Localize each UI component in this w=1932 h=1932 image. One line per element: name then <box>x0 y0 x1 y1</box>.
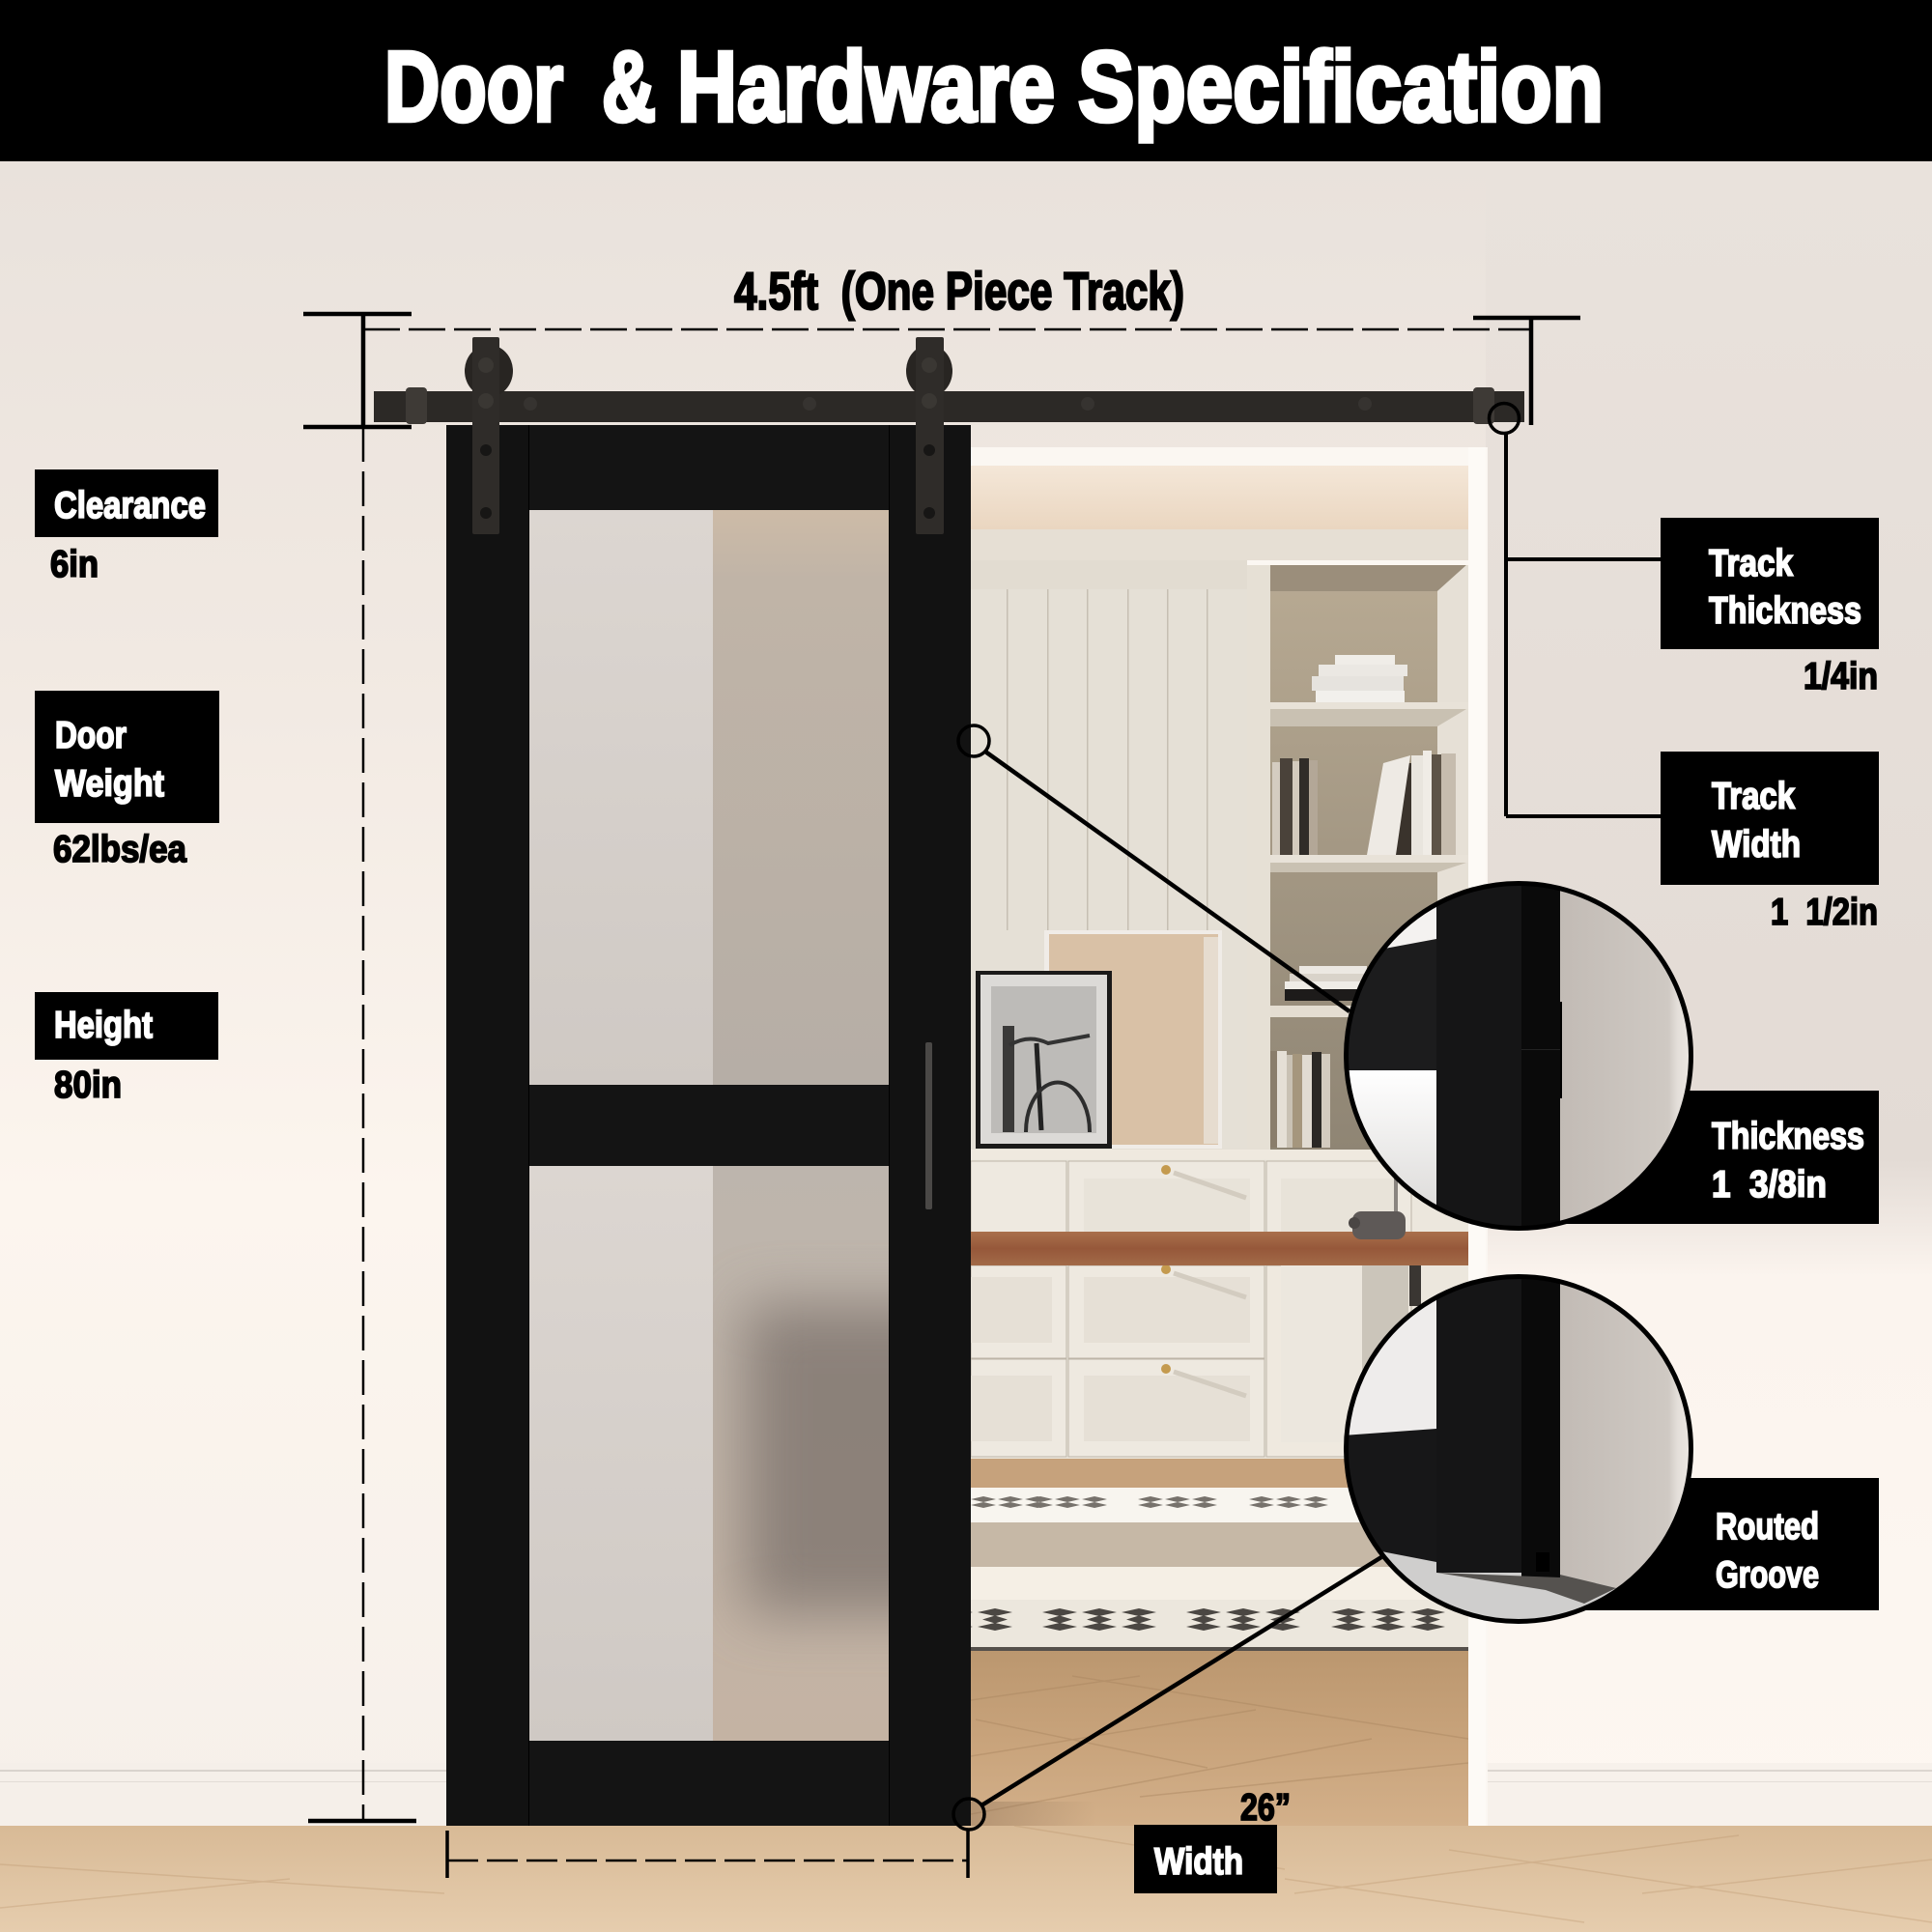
track stops <box>406 387 1494 424</box>
track length dimension <box>363 261 1580 425</box>
track callout connector <box>1490 404 1661 816</box>
label: clearance <box>35 469 218 585</box>
label: width: Width <box>1154 1841 1243 1883</box>
label: thickness: 1 3/8in <box>1712 1164 1827 1206</box>
label: height: 80in <box>54 1065 122 1106</box>
floor <box>0 1826 1932 1932</box>
label: height: Height <box>54 1005 153 1046</box>
title <box>384 31 1604 142</box>
label: track width: Track <box>1712 776 1795 817</box>
books middle shelf <box>1272 751 1456 855</box>
door <box>446 425 971 1826</box>
bookshelf <box>1247 565 1468 1154</box>
label: clearance: Clearance <box>54 485 206 526</box>
left hanger <box>465 337 513 534</box>
title: Hardware <box>677 31 1055 142</box>
height bottom cap <box>308 1819 416 1823</box>
label: clearance: 6in <box>50 544 99 585</box>
books top stack <box>1312 655 1407 702</box>
groove leader <box>953 1557 1381 1830</box>
label: track width: Width <box>1712 824 1801 866</box>
detail circle: routed groove <box>1343 1273 1695 1626</box>
label: door weight: 62lbs/ea <box>53 829 186 870</box>
barn door track <box>374 387 1524 424</box>
frosted glass lower <box>529 1166 889 1741</box>
frosted glass upper <box>529 510 889 1085</box>
leaning beige art <box>1044 930 1222 1149</box>
label: door weight: Weight <box>55 763 164 805</box>
framed bicycle photo <box>976 971 1112 1149</box>
width ticks <box>447 1831 968 1878</box>
label: routed groove <box>1519 1478 1879 1610</box>
label: thickness: Thickness <box>1712 1116 1864 1157</box>
label: routed groove: Routed <box>1716 1506 1819 1548</box>
label: door weight: Door <box>55 715 127 756</box>
label: track thickness: Thickness <box>1709 590 1861 632</box>
label: height <box>35 992 218 1106</box>
books lower shelf <box>1270 966 1367 1148</box>
wooden desk <box>971 1232 1469 1265</box>
right hanger <box>906 337 952 534</box>
title bar <box>0 0 1932 161</box>
label: width: 26” <box>1240 1787 1291 1829</box>
label: routed groove: Groove <box>1716 1554 1819 1596</box>
label: door weight <box>35 691 219 870</box>
title: & <box>602 31 656 142</box>
clearance bracket <box>303 314 412 427</box>
bowl on desk <box>1349 1169 1406 1239</box>
label: track thickness: 1/4in <box>1804 656 1878 697</box>
cabinets <box>971 1150 1468 1463</box>
width dimension <box>447 1860 968 1861</box>
title: Specification <box>1078 31 1604 142</box>
detail circle: door thickness <box>1343 879 1695 1236</box>
interior floor and rug <box>898 1459 1468 1826</box>
label: track width: 1 1/2in <box>1771 892 1878 933</box>
label: thickness <box>1519 1091 1879 1224</box>
label: track thickness: Track <box>1709 543 1793 584</box>
title: Door <box>384 31 563 142</box>
thickness leader <box>958 725 1350 1011</box>
wall panelling grooves <box>1007 589 1208 930</box>
door handle <box>925 1042 932 1209</box>
room seen through doorway <box>898 447 1488 1826</box>
track length label: 4.5ft (One Piece Track) <box>734 261 1184 321</box>
label: track width <box>1661 752 1879 933</box>
label: track thickness <box>1661 518 1879 697</box>
label: width <box>1134 1787 1291 1893</box>
height dimension <box>362 427 364 1821</box>
